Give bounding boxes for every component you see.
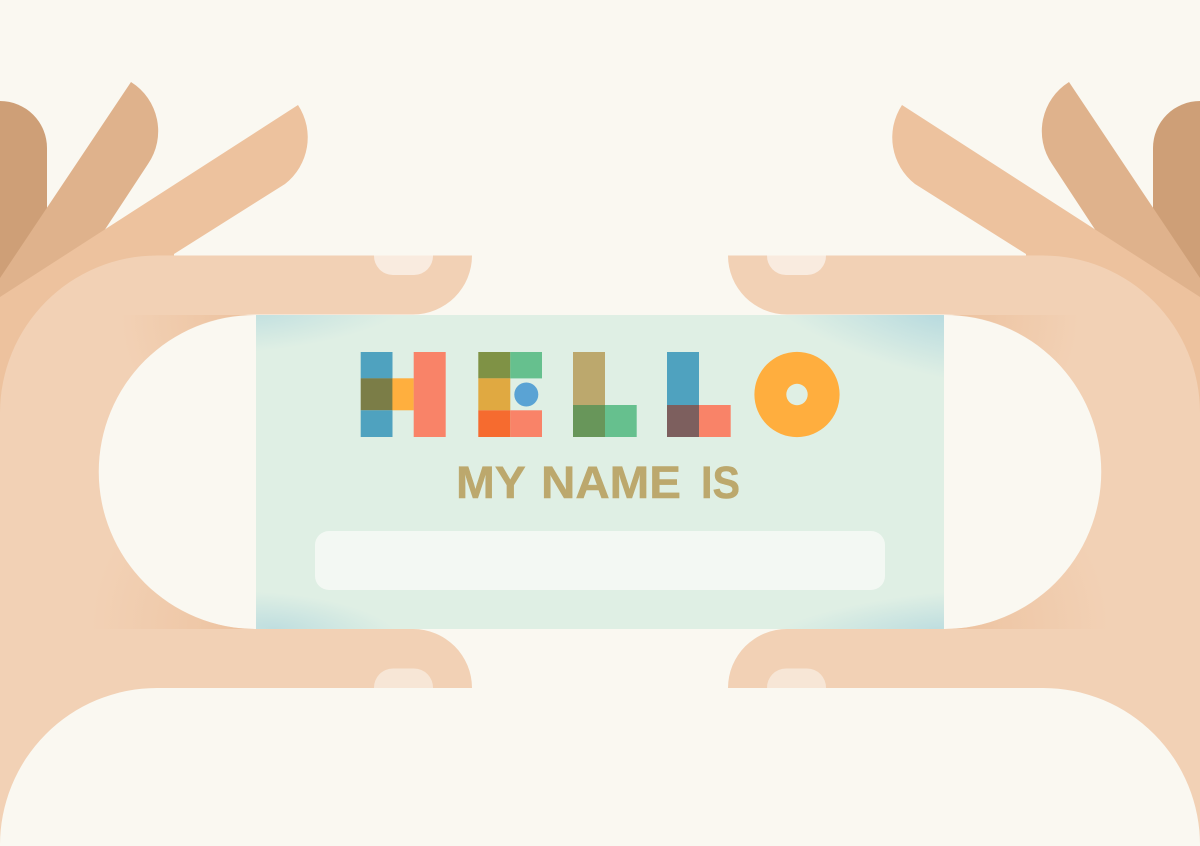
letter E xyxy=(478,352,542,437)
left index fingernail xyxy=(374,256,433,275)
left palm with index finger and thumb xyxy=(0,256,472,846)
name tag card xyxy=(256,315,944,629)
card corner tints xyxy=(256,315,944,629)
right palm lower shadow xyxy=(944,472,1110,629)
letter O xyxy=(754,352,840,437)
left palm upper shadow xyxy=(98,315,256,472)
right hand xyxy=(728,82,1200,846)
left hand xyxy=(0,82,472,846)
my name is text: MY xyxy=(456,457,525,508)
right index fingernail xyxy=(767,256,826,275)
right middle finger xyxy=(892,105,1200,460)
left pinky finger xyxy=(0,101,47,300)
my name is text: IS xyxy=(701,457,740,508)
right palm upper shadow xyxy=(944,315,1102,472)
right pinky finger xyxy=(1153,101,1200,300)
card base xyxy=(256,315,944,629)
right palm with index finger and thumb xyxy=(728,256,1200,846)
letter H xyxy=(361,352,446,437)
my name is text: NAME xyxy=(541,457,681,508)
left palm lower shadow xyxy=(90,472,256,629)
blank name field xyxy=(315,531,885,590)
left middle finger xyxy=(0,105,308,460)
first letter L xyxy=(573,352,637,437)
right ring finger xyxy=(1042,82,1200,320)
second letter L xyxy=(667,352,731,437)
left thumb nail xyxy=(374,668,433,688)
left ring finger xyxy=(0,82,158,320)
right thumb nail xyxy=(767,668,826,688)
